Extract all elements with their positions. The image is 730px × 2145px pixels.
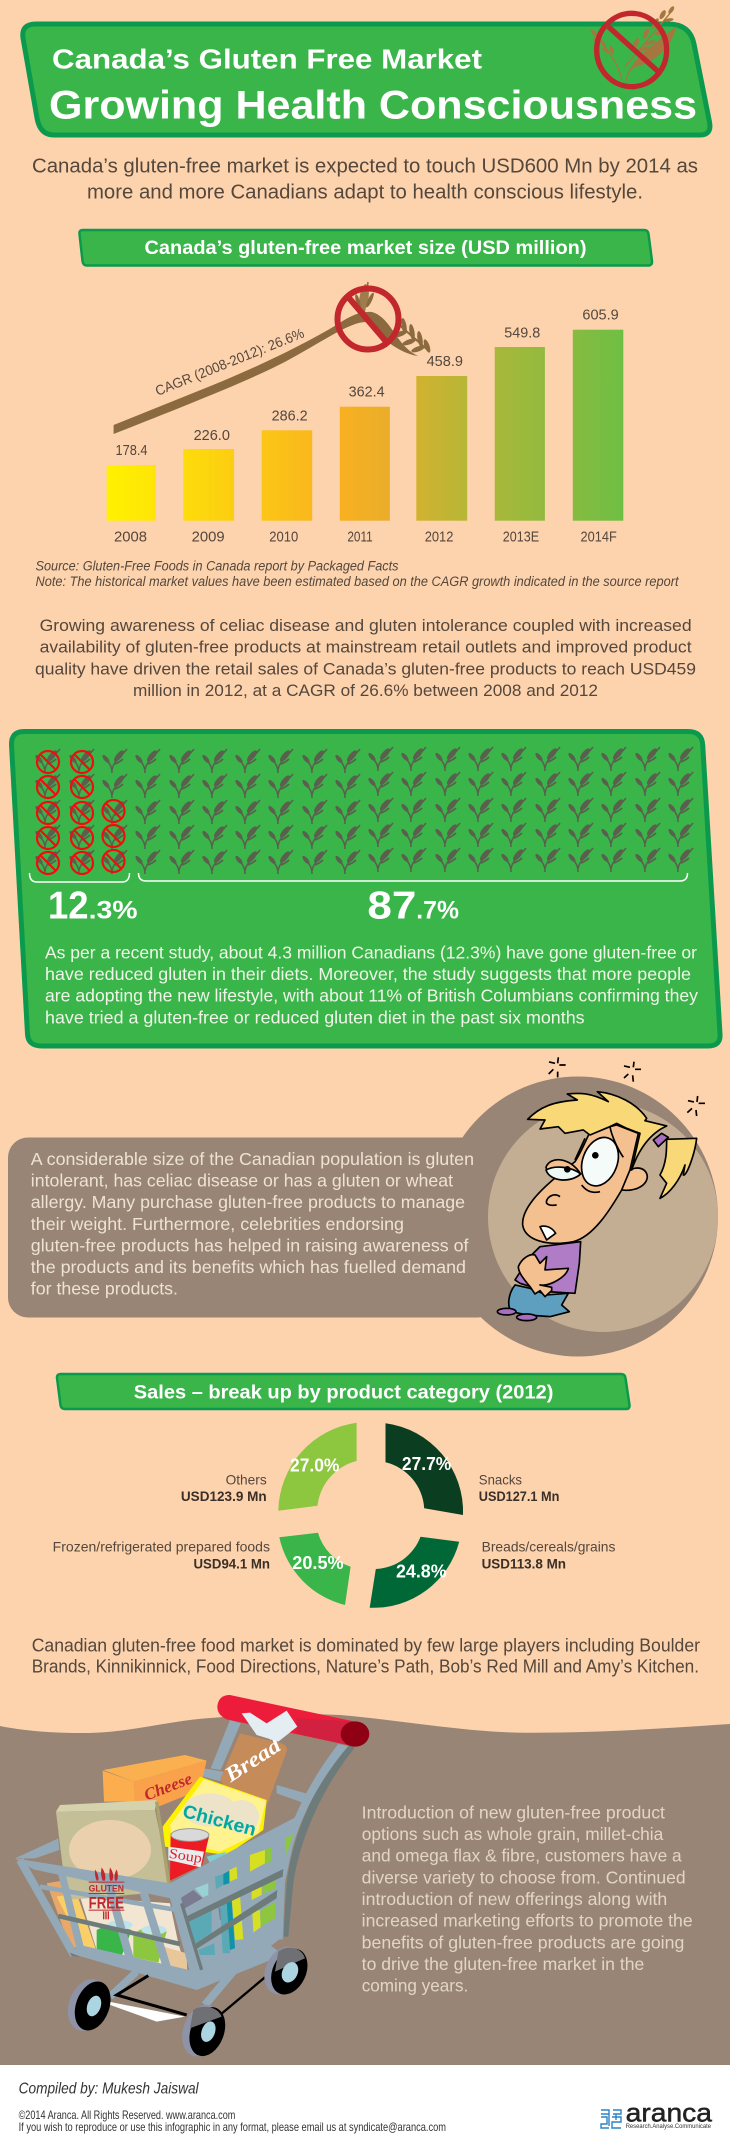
stat: 12.3%: 12 <box>48 884 89 927</box>
paragraph: market growth: million in 2012, at a CAGR of 26.6% between 2008 and 2012 <box>133 682 598 700</box>
brackets <box>30 873 688 882</box>
bar values: 549.8 <box>504 325 540 341</box>
section heading: market size: Canada’s gluten-free market size (USD million) <box>144 238 586 259</box>
section heading: sales break up: Sales – break up by product category (2012) <box>134 1381 553 1403</box>
bar values: 286.2 <box>272 409 308 425</box>
bar values <box>116 307 619 459</box>
category labels: Frozen/refrigerated prepared foods <box>53 1539 270 1555</box>
year labels: 2013E <box>503 529 539 546</box>
icon: shopping cart with groceries <box>15 1695 369 2062</box>
stat: 12.3%: .3% <box>89 896 138 924</box>
paragraph: market players: Canadian gluten-free food market is dominated by few large players including Boulder <box>32 1636 700 1656</box>
year labels: 2012 <box>425 529 453 546</box>
paragraph: market growth: Growing awareness of celiac disease and gluten intolerance coupled with increased <box>40 617 692 635</box>
callout text: the products and its benefits which has fuelled demand <box>31 1257 466 1277</box>
percent labels: 27.7% <box>402 1454 451 1474</box>
segment: frozen <box>279 1533 351 1605</box>
text: outlook paragraph: coming years. <box>362 1976 468 1996</box>
panel text: have tried a gluten-free or reduced gluten diet in the past six months <box>45 1007 585 1027</box>
CAGR label: CAGR (2008-2012): 26.6% <box>153 325 306 399</box>
bar chart <box>107 282 623 546</box>
wheel: front left <box>61 1974 117 2036</box>
no-wheat symbol <box>338 288 398 350</box>
callout text: A considerable size of the Canadian population is gluten <box>31 1149 474 1169</box>
bars <box>107 330 623 521</box>
panel text: are adopting the new lifestyle, with about 11% of British Columbians confirming they <box>45 986 698 1006</box>
growth arrow swoosh with wheat <box>114 282 432 434</box>
icon: no wheat <box>590 5 677 87</box>
product: bread <box>219 1733 287 1833</box>
cart basket right side <box>170 1814 302 1990</box>
copyright text: If you wish to reproduce or use this infographic in any format, please email us at syndicate@aranca.com <box>19 2120 446 2134</box>
text: outlook paragraph: Introduction of new gluten-free product <box>362 1802 665 1822</box>
gluten free badge: GLUTEN <box>89 1884 124 1894</box>
category labels: USD127.1 Mn <box>479 1488 559 1504</box>
percent labels <box>290 1454 451 1581</box>
product: soup can: Soup <box>168 1847 203 1867</box>
callout text: gluten-free products has helped in raising awareness of <box>31 1235 469 1255</box>
year labels: 2008 <box>114 529 147 546</box>
footer <box>0 2065 730 2145</box>
category labels: Snacks <box>479 1471 522 1487</box>
copyright text: ©2014 Aranca. All Rights Reserved. www.aranca.com <box>19 2108 235 2122</box>
stat: 12.3% <box>48 884 138 927</box>
icon: cartoon person with stomach ache <box>497 1057 705 1321</box>
paragraph: market players: Brands, Kinnikinnick, Food Directions, Nature’s Path, Bob’s Red Mill and Amy’s Kitchen. <box>32 1657 699 1677</box>
product: cereal box <box>56 1800 171 1900</box>
bar values: 605.9 <box>582 307 619 323</box>
product: bread: Bread <box>219 1733 285 1787</box>
segment: snacks <box>386 1423 463 1515</box>
intro text: more and more Canadians adapt to health conscious lifestyle. <box>87 181 643 203</box>
source and note <box>36 559 680 589</box>
text: outlook paragraph: benefits of gluten-free products are going <box>362 1932 684 1952</box>
product: cheese: Cheese <box>141 1769 195 1804</box>
callout shape <box>8 1076 718 1356</box>
category labels: Others <box>226 1471 267 1487</box>
text: outlook paragraph <box>362 1802 693 1996</box>
undercarriage <box>92 1953 272 2022</box>
stat: 87.7%: 87 <box>367 884 416 927</box>
year labels: 2011 <box>347 529 373 546</box>
source and note: Note: The historical market values have been estimated based on the CAGR growth indicated in the source report <box>36 574 680 589</box>
gluten free badge: FREE <box>89 1894 124 1913</box>
compiled by: Compiled by: Mukesh Jaiswal <box>19 2080 199 2097</box>
year labels: 2009 <box>192 529 225 546</box>
source and note: Source: Gluten-Free Foods in Canada report by Packaged Facts <box>36 559 399 574</box>
product: soup can <box>168 1829 209 1881</box>
product: chicken <box>163 1777 267 1870</box>
paragraph: market growth: availability of gluten-free products at mainstream retail outlets and improved product <box>40 639 692 657</box>
category labels: Breads/cereals/grains <box>482 1539 615 1555</box>
wheel: rear right <box>257 1940 315 2001</box>
logo: aranca: Research.Analyse.Communicate <box>626 2123 711 2130</box>
paragraph: market players <box>32 1636 700 1677</box>
year labels: 2014F <box>580 529 617 546</box>
heading line 2: Growing Health Consciousness <box>49 84 697 128</box>
bar values: 458.9 <box>427 354 463 370</box>
heading line 1: Canada’s Gluten Free Market <box>52 44 482 74</box>
logo: aranca <box>601 2098 713 2130</box>
stat: 87.7% <box>367 884 459 927</box>
percent labels: 20.5% <box>292 1553 344 1573</box>
text: outlook paragraph: increased marketing efforts to promote the <box>362 1911 693 1931</box>
cart back frame <box>203 1720 355 1940</box>
paragraph: market growth: quality have driven the retail sales of Canada’s gluten-free products to reach USD459 <box>35 660 696 678</box>
copyright text <box>19 2108 446 2134</box>
callout text: intolerant, has celiac disease or has a gluten or wheat <box>31 1171 453 1191</box>
text: outlook paragraph: to drive the gluten-free market in the <box>362 1954 644 1974</box>
items inside basket <box>47 1880 187 1974</box>
text: outlook paragraph: options such as whole grain, millet-chia <box>362 1824 664 1844</box>
panel: study pictogram <box>11 732 720 1046</box>
segment: breads <box>370 1537 459 1608</box>
logo: aranca: aranca <box>626 2098 713 2128</box>
bottom wave panel <box>0 1714 730 2065</box>
callout text: for these products. <box>31 1279 178 1299</box>
category labels: USD113.8 Mn <box>482 1555 566 1571</box>
text: outlook paragraph: and omega flax & fibre, customers have a <box>362 1846 682 1866</box>
gluten free badge <box>89 1867 124 1919</box>
percent labels: 24.8% <box>396 1561 447 1581</box>
category labels: USD123.9 Mn <box>181 1488 267 1504</box>
title banner <box>23 5 710 135</box>
segment: others <box>278 1423 357 1511</box>
year labels <box>114 529 617 546</box>
category labels <box>53 1471 615 1571</box>
text: outlook paragraph: introduction of new offerings along with <box>362 1889 667 1909</box>
donut chart <box>53 1423 615 1608</box>
cart handle <box>217 1695 369 1747</box>
panel text: As per a recent study, about 4.3 million Canadians (12.3%) have gone gluten-free or <box>45 942 697 962</box>
callout text <box>31 1149 474 1299</box>
section heading: market size <box>79 230 652 266</box>
year labels: 2010 <box>269 529 298 546</box>
callout text: allergy. Many purchase gluten-free products to manage <box>31 1192 465 1212</box>
wheat pictogram grid <box>34 747 693 874</box>
intro text: Canada’s gluten-free market is expected to touch USD600 Mn by 2014 as <box>32 156 698 178</box>
product: chicken: Chicken <box>181 1800 258 1840</box>
stat: 87.7%: .7% <box>416 896 459 924</box>
bar values: 362.4 <box>349 385 385 401</box>
text: outlook paragraph: diverse variety to choose from. Continued <box>362 1867 686 1887</box>
bar values: 226.0 <box>194 428 230 444</box>
percent labels: 27.0% <box>290 1456 339 1476</box>
wheel: front centre <box>175 1999 232 2062</box>
panel text: have reduced gluten in their diets. Moreover, the study suggests that more people <box>45 964 691 984</box>
callout text: their weight. Furthermore, celebrities endorsing <box>31 1214 404 1234</box>
cart basket front mesh <box>15 1838 283 1990</box>
category labels: USD94.1 Mn <box>194 1555 270 1571</box>
section heading: sales break up <box>57 1374 630 1409</box>
panel text <box>45 942 698 1027</box>
product: cheese <box>103 1755 207 1807</box>
intro text <box>32 156 698 203</box>
bar values: 178.4 <box>116 443 148 459</box>
paragraph: market growth <box>35 617 696 700</box>
panel: gluten intolerance callout <box>8 1057 718 1356</box>
character backdrop <box>488 1102 718 1332</box>
